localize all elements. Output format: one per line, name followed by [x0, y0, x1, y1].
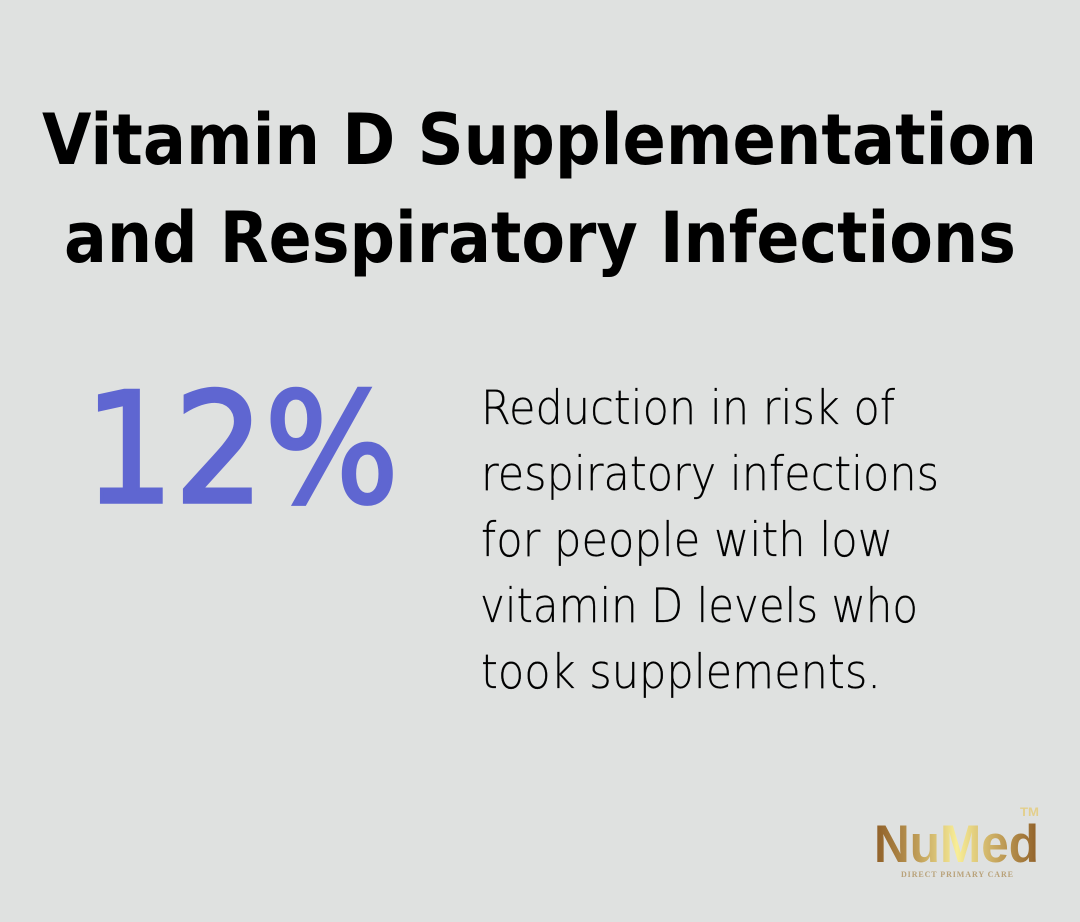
logo: NuMed	[874, 805, 1039, 879]
big statistic: 12%: 12%	[84, 361, 399, 539]
description text	[480, 381, 939, 700]
description text: Reduction in risk of	[481, 381, 895, 436]
description text: took supplements.	[481, 645, 881, 700]
description text: for people with low	[481, 513, 893, 568]
title	[42, 99, 1037, 279]
description text: respiratory infections	[481, 447, 939, 502]
logo trademark: TM	[1020, 805, 1039, 819]
logo tagline: DIRECT PRIMARY CARE	[901, 870, 1013, 879]
description text: vitamin D levels who	[480, 579, 918, 634]
logo wordmark: NuMed	[874, 815, 1039, 874]
